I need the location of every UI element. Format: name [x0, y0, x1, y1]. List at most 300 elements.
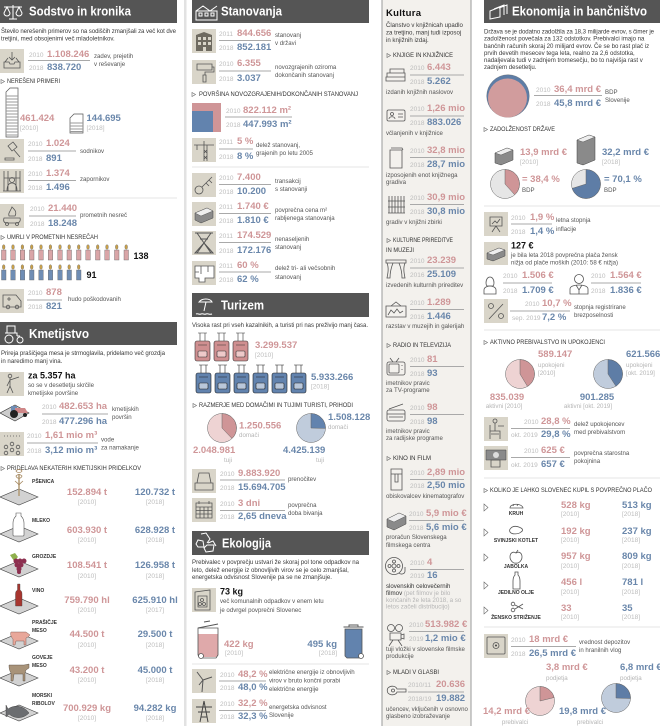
value 32,2 mrd €: [602, 147, 650, 166]
stat: zadeve: v reševanje: [94, 61, 126, 68]
stat: izposoja: gradiva: [386, 179, 407, 186]
heading: razmerje: RAZMERJE MED DOMAČIMI IN TUJIMI TURISTI, PRIHODI: [199, 400, 353, 409]
value 5.933.266: [2018]: [311, 384, 329, 390]
stat: tuji vložki: produkcije: [386, 653, 414, 660]
panel: Kultura: [386, 8, 468, 720]
stat: delež po 2005: delež stanovanj,: [256, 142, 300, 149]
stat: proračun: filmskega centra: [386, 542, 431, 549]
crop: pšenica: [0, 470, 176, 506]
stat: 5.357 ha: za 5.357 ha: [28, 370, 77, 380]
stat: prenočitve: 15.694.705: [238, 482, 286, 493]
value 3.299.537: [255, 340, 297, 359]
stat: površina: [225, 105, 292, 130]
stat: filmi: filmov (pet filmov je bilo: [386, 590, 451, 597]
heading: površina: POVRŠINA NOVOZGRAJENIH/DOKONČANIH STANOVANJ: [199, 89, 358, 98]
stat: energetska odvisnost: energetska odvisnost: [269, 704, 327, 711]
stat: proračun: 2010: [409, 511, 424, 518]
stat: izposoja: 2010: [410, 148, 425, 155]
stat: nenaseljena: nenaseljenih: [275, 236, 309, 243]
labels: turisti 2018: 1.508.128: [328, 412, 370, 423]
stat: inflacija: [484, 212, 591, 237]
stat: tri- ali večsobna: [192, 260, 335, 285]
stat: naslovi: 2010: [410, 65, 425, 72]
labels: prebivalstvo 2019: 621.566: [626, 349, 660, 360]
heading: umrli v prometnih nesrečah: [1, 232, 98, 241]
stat: delež upokojencev: 29,8 %: [541, 429, 571, 440]
header: Ekonomija in bančništvo: [484, 0, 660, 23]
stat: brezposelnost: [484, 298, 626, 323]
stat: pokojnina: pokojnina: [574, 458, 601, 465]
stat: proračun: [386, 508, 467, 549]
stat: depoziti: in hranilnih vlog: [579, 647, 621, 654]
stat: radio: 2010: [410, 405, 425, 412]
stat: glasba: učencev, vključenih v osnovno: [386, 706, 468, 713]
value 495 kg: [2018]: [319, 650, 337, 657]
stat: proračun: 2018: [409, 525, 424, 532]
stat: obiskovalci: [386, 467, 465, 500]
stat: pokojnina: 657 €: [541, 459, 565, 470]
stat: hudo poškodovani: [0, 287, 121, 313]
paper stack 2010: [6, 88, 18, 137]
stat: plača moški: 2010: [591, 273, 606, 280]
stat: voda za namakanje: vode: [101, 436, 115, 444]
labels: vloge 2010: 3,8 mrd €: [546, 662, 588, 673]
stat: TV: 93: [427, 368, 438, 379]
item: žensko striženje: [484, 602, 640, 621]
heading: pridelava: PRIDELAVA NEKATERIH KMETIJSKIH PRIDELKOV: [7, 465, 142, 472]
stat: glasba: 19.882: [436, 693, 465, 704]
stat: sodniki: 2010: [28, 141, 43, 148]
label: 70,1 %: = 70,1 %: [604, 174, 642, 185]
stat: nenaseljena: [192, 230, 309, 256]
value 422 kg: 422 kg: [224, 639, 254, 650]
crop: pšenica: 120.732 t: [135, 487, 176, 498]
crop: morski ribolov: [0, 693, 177, 722]
stat: inflacija: 2018: [511, 229, 526, 236]
stat: brezposelnost: brezposelnosti: [574, 312, 613, 319]
stat: prometne nesreče: 2018: [30, 221, 45, 228]
labels: prebivalstvo 2010: 589.147: [538, 349, 572, 360]
intro text: [386, 22, 464, 44]
value 32,2 mrd €: 32,2 mrd €: [602, 147, 650, 158]
heading: Kultura: Kultura: [386, 8, 422, 19]
stat: depoziti: 2010: [511, 637, 526, 644]
item: žensko striženje: 35: [622, 603, 633, 614]
panel: Stanovanja: [192, 0, 369, 285]
crop: morski ribolov: RIBOLOV: [32, 701, 55, 707]
stat: površina: 2018: [226, 122, 241, 129]
labels: vloge 2018: [559, 662, 660, 726]
crop: vino: [2017]: [146, 607, 164, 614]
stat: BDP: BDP: [605, 89, 618, 96]
intro text: [1, 28, 177, 42]
stat: plača ženske: 1.506 €: [522, 270, 554, 281]
stat: depoziti: 26,5 mrd €: [529, 648, 577, 659]
stat: površina: 2010: [226, 108, 241, 115]
value 495 kg: 495 kg: [307, 639, 337, 650]
item: jabolka: [2010]: [561, 563, 579, 570]
stat: glasba: 2018/19: [408, 696, 432, 703]
item: kruh: 528 kg: [561, 500, 591, 511]
stat: prenočitve: 9.883.920: [238, 468, 280, 479]
intro text: za tretjino, manj tudi izposoj: [386, 30, 461, 36]
candles 2018: [2, 265, 81, 280]
value 13,9 mrd €: [520, 147, 568, 166]
stat: depoziti: [484, 634, 631, 659]
value 3.299.537: [2010]: [255, 352, 273, 359]
crop: prašičje meso: MESO: [32, 628, 47, 634]
item: jedilno olje: 456 l: [561, 577, 582, 588]
stat: prometne nesreče: 18.248: [48, 218, 77, 229]
intro text: leto, delež energije iz obnovljivih virov se je celo zmanjšal,: [192, 567, 349, 574]
stat: doba bivanja: 3 dni: [238, 498, 260, 509]
stat: razstave: razstav v muzejih in galerijah: [386, 323, 464, 330]
stat: razstave: [386, 297, 464, 330]
panel: Ekonomija in bančništvo: [483, 0, 660, 726]
labels: vloge 2018: prebivalci: [577, 719, 603, 726]
crop: morski ribolov: MORSKI: [32, 693, 53, 699]
stat: novozgrajena stanovanja: dokončanih stanovanj: [275, 72, 334, 79]
stat: stanovanj v državi: [192, 28, 301, 53]
stat: tuji vložki: 2019: [409, 636, 424, 643]
stat: doba bivanja: 2,65 dneva: [238, 511, 287, 522]
labels: turisti 2010: [193, 420, 281, 464]
stat: tri- ali večsobna: stanovanj: [275, 274, 301, 281]
crop: goveje meso: GOVEJE: [32, 655, 53, 661]
stat: obnovljivi viri: 2010: [220, 672, 235, 679]
stat: 5.357 ha: kmetijske površine: [28, 390, 79, 397]
stat: kmetijske površine: 2010: [42, 404, 57, 411]
stat: površina: 822.112 m²: [243, 105, 291, 116]
stat: sodniki: 1.024: [46, 138, 70, 149]
labels: turisti 2018: domači: [328, 424, 348, 431]
value 144.695: [2018]: [86, 125, 105, 132]
stat: energetska odvisnost: 32,3 %: [238, 711, 268, 722]
stat: brezposelnost: 7,2 %: [542, 312, 567, 323]
stat: BDP: 45,8 mrd €: [554, 98, 602, 109]
intro text: tretjini, med obsojenimi več mladoletnikov.: [1, 36, 115, 42]
crop: grozdje: 108.541 t: [67, 560, 108, 571]
stat: zbirka: 30,8 mio: [427, 206, 465, 217]
labels: turisti 2010: domači: [239, 432, 259, 439]
item: svinjski kotlet: 192 kg: [561, 526, 591, 537]
stat: delež upokojencev: med prebivalstvom: [574, 429, 625, 436]
intro text: Država se je dodatno zadolžila za 18,3 milijarde evrov, s čimer je: [484, 28, 655, 36]
stat: stanovanj v državi: 2018: [219, 45, 234, 52]
stat: prometne nesreče: [0, 203, 127, 229]
value 5.933.266: 5.933.266: [311, 372, 353, 383]
stat: plača ženske: [484, 270, 554, 296]
stat: radio: 2018: [410, 419, 425, 426]
stat: proračun: 5,9 mio €: [426, 508, 467, 519]
stat: zaporniki: 1.496: [46, 182, 70, 193]
stat: hudo poškodovani: 2018: [28, 304, 43, 311]
item: svinjski kotlet: [484, 526, 652, 544]
crop: grozdje: [2018]: [146, 573, 164, 580]
stat: 73 kg: več komunalnih odpadkov v enem letu: [220, 598, 324, 605]
stat: tri- ali večsobna: 60 %: [237, 260, 259, 271]
stat: hudo poškodovani: 821: [46, 301, 63, 312]
labels: turisti 2018: [283, 412, 370, 464]
candles 2010: [2, 245, 128, 260]
crop: goveje meso: [2018]: [146, 677, 164, 684]
stat: energetska odvisnost: 32,2 %: [238, 698, 268, 709]
stat: plača ženske: 2010: [503, 273, 518, 280]
labels: turisti 2010: tuji: [224, 457, 232, 464]
stat: izposoja: 2018: [410, 162, 425, 169]
stat: inflacija: 2010: [511, 215, 526, 222]
item: svinjski kotlet: [2018]: [622, 537, 640, 544]
panel: Sodstvo in kronika: [0, 0, 177, 313]
crop: goveje meso: 45.000 t: [138, 665, 173, 676]
stat: plača ženske: 2018: [503, 288, 518, 295]
value 422 kg: [2010]: [225, 650, 243, 657]
pie: turisti 2018: [296, 414, 326, 442]
heading: umrli v prometnih nesrečah: UMRLI V PROMETNIH NESREČAH: [7, 232, 98, 241]
stat: naslovi: 6.443: [427, 62, 451, 73]
value 461.424: [20, 113, 55, 132]
stat: kulturne prireditve: [386, 255, 464, 289]
header: Kmetijstvo: [0, 322, 177, 345]
stat: pokojnina: 2010: [524, 448, 539, 455]
heading: aktivno prebivalstvo: AKTIVNO PREBIVALSTVO IN UPOKOJENCI: [490, 339, 605, 346]
stat: nenaseljena: 174.529: [237, 230, 271, 241]
stat: doba bivanja: povprečna: [288, 502, 317, 509]
crop: mleko: 628.928 t: [135, 525, 176, 536]
stat: tri- ali večsobna: 2011: [219, 263, 233, 270]
stat: izposoja: 28,7 mio: [427, 159, 465, 170]
stat: hudo poškodovani: 2010: [28, 290, 43, 297]
stat: sodniki: 2018: [28, 156, 43, 163]
stat: kulturne prireditve: 2010: [410, 258, 425, 265]
item: svinjski kotlet: SVINJSKI KOTLET: [494, 538, 538, 544]
item: jabolka: 957 kg: [561, 551, 591, 562]
intro text: prvih devetih mesecev tega leta, realno za 2,6 odstotka,: [484, 50, 635, 57]
stat: zadeve: 2010: [29, 52, 44, 59]
intro text: [192, 559, 360, 581]
item: jedilno olje: JEDILNO OLJE: [498, 590, 535, 596]
stat: voda za namakanje: [0, 430, 140, 456]
bin 2010: [198, 621, 218, 658]
heading: razmerje: [193, 400, 353, 409]
stat: TV: 2010: [410, 357, 425, 364]
pie: prebivalstvo 2010: [506, 360, 534, 388]
stat: prenočitve: prenočitev: [288, 476, 317, 483]
stat: 5.357 ha: [0, 370, 95, 397]
intro text: in naredimo manj vina.: [1, 358, 63, 365]
stat: doba bivanja: 2010: [220, 501, 235, 508]
stat: kmetijske površine: 477.296 ha: [59, 416, 108, 427]
stat: obiskovalci: 2,50 mio: [427, 480, 465, 491]
crop: prašičje meso: [0, 618, 173, 649]
value 91: 91: [86, 270, 97, 280]
pie: turisti 2010: [208, 414, 236, 442]
crop: morski ribolov: 700.929 kg: [63, 703, 111, 714]
stat: transakcije: [192, 172, 307, 197]
item: kruh: [2010]: [561, 511, 579, 518]
crop: prašičje meso: 29.500 t: [138, 629, 173, 640]
item: kruh: 513 kg: [622, 500, 652, 511]
crop: prašičje meso: PRAŠIČJE: [32, 618, 58, 626]
intro text: zadolženost povečala za 132 odstotkov. Prebivalci imajo na: [484, 36, 645, 42]
stat: delež po 2005: 2011: [219, 139, 233, 146]
stat: pokojnina: povprečna starostna: [574, 450, 630, 457]
crop: grozdje: [2010]: [78, 573, 96, 580]
crop: vino: [2010]: [78, 607, 96, 614]
stat: zaporniki: 2018: [28, 185, 43, 192]
stat: filmi: slovenskih celovečernih: [386, 583, 450, 590]
stat: 73 kg: [192, 586, 324, 614]
item: jabolka: [484, 550, 652, 570]
subheading: prireditve: KULTURNE PRIREDITVE: [393, 237, 453, 244]
stat: prometne nesreče: prometnih nesreč: [80, 212, 127, 219]
labels: turisti 2010: 2.048.981: [193, 445, 236, 456]
stat: obnovljivi viri: [192, 669, 355, 693]
stat: stanovanj v državi: 2011: [219, 31, 233, 38]
crop: mleko: MLEKO: [32, 518, 50, 524]
pie: dolg 2010: [490, 169, 520, 198]
stat: obnovljivi viri: virov v bruto končni porabi: [269, 678, 340, 684]
stat: zbirka: [386, 192, 465, 226]
stat: kulturne prireditve: izvedenih kulturnih prireditev: [386, 282, 464, 289]
stat: transakcije: 2018: [219, 189, 234, 196]
item: jedilno olje: 781 l: [622, 577, 643, 588]
header: Ekonomija in bančništvo: Ekonomija in bančništvo: [512, 4, 647, 18]
stat: tuji vložki: 2010: [409, 622, 424, 629]
stat: energetska odvisnost: 2010: [220, 701, 235, 708]
item: svinjski kotlet: 237 kg: [622, 526, 652, 537]
stat: nenaseljena: 172.176: [237, 245, 271, 256]
stat: zbirka: 30,9 mio: [427, 192, 465, 203]
header: Stanovanja: [192, 0, 369, 23]
item: svinjski kotlet: [2010]: [561, 537, 579, 544]
stat: obiskovalci: 2010: [410, 470, 425, 477]
stat: cena: povprečna cena m²: [275, 207, 327, 214]
crop: prašičje meso: [2010]: [78, 642, 96, 649]
stat: pokojnina: [484, 445, 630, 470]
value 13,9 mrd €: 13,9 mrd €: [520, 147, 568, 158]
panel: Kmetijstvo: [0, 322, 178, 722]
stat: delež upokojencev: delež upokojencev: [574, 421, 625, 428]
stat: naslovi: 5.262: [427, 76, 451, 87]
stat: TV: [386, 354, 464, 394]
stat: nenaseljena: stanovanj: [275, 244, 301, 251]
panel: Ekologija: [192, 531, 369, 723]
value 495 kg: [307, 639, 337, 657]
value 422 kg: [224, 639, 254, 657]
labels: vloge 2010: prebivalci: [502, 719, 528, 726]
labels: vloge 2010: 14,2 mrd €: [483, 706, 531, 717]
labels: prebivalstvo 2010: [2010]: [538, 370, 555, 377]
stat: zaporniki: zapornikov: [80, 176, 110, 183]
stat: inflacija: inflacije: [556, 226, 577, 233]
crop: vino: [0, 584, 178, 614]
stat: novozgrajena stanovanja: 2018: [219, 76, 234, 83]
stat: energetska odvisnost: Slovenije: [269, 712, 294, 719]
stat: 127 €: 127 €: [511, 240, 534, 250]
value 5.933.266: [311, 372, 353, 390]
stat: 127 €: nižja od plače moških (2010: 58 € nižja): [511, 260, 618, 266]
stat: proračun: 5,6 mio €: [426, 522, 467, 533]
labels: turisti 2010: 1.250.556: [239, 420, 281, 432]
stat: voda za namakanje: za namakanje: [101, 444, 140, 452]
crop: grozdje: [0, 553, 176, 580]
heading: nerešeni primeri: [1, 76, 60, 85]
stat: člani: včlanjenih v knjižnice: [386, 130, 444, 137]
intro text: zadnjem desetletju.: [484, 64, 537, 71]
stat: obnovljivi viri: električne energije iz obnovljivih: [269, 669, 355, 676]
paper stack 2018: [70, 114, 83, 133]
heading: zadolženost države: ZADOLŽENOST DRŽAVE: [490, 124, 555, 133]
stat: novozgrajena stanovanja: [192, 58, 337, 84]
value 13,9 mrd €: [2010]: [520, 159, 538, 166]
stat: kulturne prireditve: 23.239: [427, 255, 456, 266]
stat: filmi: končanih že leta 2018, a so: [386, 597, 462, 604]
intro text: nadaljevala tudi v zadnjem tromesečju, bo to najvišja rast v: [484, 57, 644, 64]
money stack 2018: [577, 135, 595, 165]
stat: prenočitve: 2010: [220, 471, 235, 478]
crop: goveje meso: 43.200 t: [70, 665, 105, 676]
stat: plača moški: 2018: [591, 288, 606, 295]
stat: tuji vložki: 1,2 mio €: [425, 633, 466, 644]
subheading: knjige: [387, 50, 453, 59]
stat: člani: 1,26 mio: [427, 103, 465, 114]
item: žensko striženje: 33: [561, 603, 572, 614]
value 461.424: 461.424: [20, 113, 55, 124]
stat: delež upokojencev: 28,8 %: [541, 416, 571, 427]
stat: izposoja: 32,8 mio: [427, 145, 465, 156]
stat: obnovljivi viri: 48,0 %: [238, 682, 268, 693]
subheading: prireditve: IN MUZEJI: [386, 247, 414, 254]
stat: člani: 2018: [410, 120, 425, 127]
subheading: knjige: KNJIGE IN KNJIŽNICE: [393, 50, 453, 59]
stat: kulturne prireditve: 2016: [410, 272, 425, 279]
crop: goveje meso: MESO: [32, 663, 47, 669]
stat: kmetijske površine: kmetijskih: [112, 406, 139, 413]
stat: cena: rabljenega stanovanja: [275, 215, 335, 222]
stat: transakcije: 7.400: [237, 172, 261, 183]
crop: vino: VINO: [32, 588, 44, 594]
stat: filmi: letos začeli distribucijo): [386, 604, 450, 610]
stat: člani: [386, 103, 465, 137]
value 144.695: 144.695: [86, 113, 122, 124]
stat: obiskovalci: 2,89 mio: [427, 467, 465, 478]
stat: naslovi: izdanih knjižnih naslovov: [386, 89, 454, 96]
stat: novozgrajena stanovanja: 3.037: [237, 73, 261, 84]
header: Kmetijstvo: Kmetijstvo: [29, 327, 89, 341]
stat: kmetijske površine: [0, 401, 139, 427]
stat: BDP: 2010: [536, 87, 551, 94]
subheading: mladi: MLADI V GLASBI: [393, 669, 439, 676]
stat: transakcije: 2010: [219, 175, 234, 182]
item: kruh: [2018]: [622, 511, 640, 518]
item: žensko striženje: [2018]: [622, 614, 640, 621]
labels: vloge 2010: [483, 662, 588, 726]
stat: tri- ali večsobna: 2018: [219, 277, 234, 284]
stat: TV: za TV-programe: [386, 387, 430, 394]
header: Ekologija: [192, 531, 369, 555]
value 3.299.537: 3.299.537: [255, 340, 297, 351]
stat: brezposelnost: 2010: [525, 301, 540, 308]
stat: radio: za radijske programe: [386, 435, 444, 442]
panel: Turizem: [192, 293, 370, 522]
stat: doba bivanja: [192, 498, 323, 522]
stat: depoziti: vrednost depozitov: [579, 639, 631, 646]
stat: obnovljivi viri: električne energije: [269, 686, 319, 693]
pie: dolg 2018: [572, 169, 601, 198]
labels: prebivalstvo 2010: [486, 349, 572, 410]
stat: transakcije: 10.200: [237, 186, 266, 197]
